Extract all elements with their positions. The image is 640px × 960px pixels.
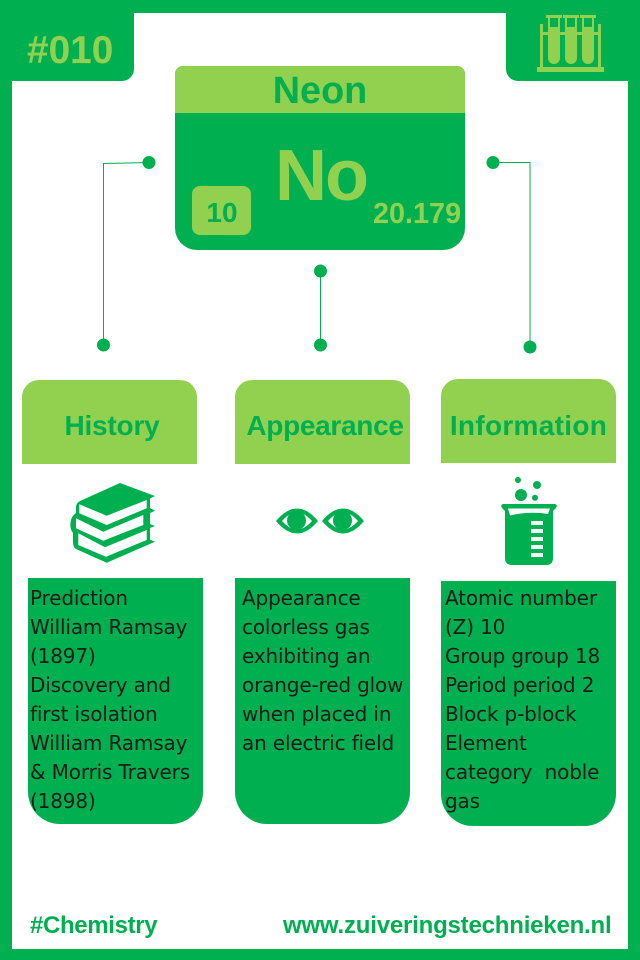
panel: information text: Element <box>445 731 527 755</box>
panel: history text: William Ramsay <box>30 615 187 639</box>
panel: information text: Period period 2 <box>445 673 594 697</box>
connector: information <box>486 156 536 354</box>
atomic number box <box>192 186 251 235</box>
heading: history: History <box>64 410 160 441</box>
panel: history text: William Ramsay <box>30 731 187 755</box>
connector: appearance <box>314 264 327 352</box>
panel: information text: Atomic number <box>445 586 597 610</box>
panel: information text: gas <box>445 789 480 813</box>
panel: appearance text <box>235 578 410 824</box>
panel: history text: (1898) <box>30 789 96 813</box>
panel: appearance text: orange-red glow <box>242 673 403 697</box>
panel: history text: Discovery and <box>30 673 171 697</box>
footer: website: www.zuiveringstechnieken.nl <box>283 912 611 939</box>
connector: history <box>97 156 156 352</box>
heading: information: Information <box>450 410 607 441</box>
element name band: Neon <box>273 70 367 112</box>
panel: information text: (Z) 10 <box>445 615 505 639</box>
badge text: #010 <box>27 29 113 72</box>
panel: information text: category noble <box>445 760 599 784</box>
atomic mass: 20.179 <box>373 198 461 230</box>
panel: history text: & Morris Travers <box>30 760 190 784</box>
panel: appearance text: an electric field <box>242 731 394 755</box>
panel: information text <box>441 581 616 826</box>
heading: information <box>441 379 616 463</box>
icon: beaker <box>501 477 557 565</box>
icon: eyes <box>276 508 364 534</box>
panel: history text: (1897) <box>30 644 96 668</box>
heading: history <box>22 380 197 464</box>
panel: history text: first isolation <box>30 702 158 726</box>
badge: element number <box>0 0 134 81</box>
panel: history text <box>28 578 203 824</box>
element name band <box>175 66 465 113</box>
heading: appearance <box>235 380 410 464</box>
panel: appearance text: exhibiting an <box>242 644 370 668</box>
icon: test tubes <box>537 15 604 72</box>
panel: appearance text: Appearance <box>242 586 361 610</box>
panel: appearance text: when placed in <box>242 702 391 726</box>
atomic number box: 10 <box>206 197 238 228</box>
footer: hashtag: #Chemistry <box>30 912 157 939</box>
badge: test tube icon <box>506 0 640 81</box>
panel: appearance text: colorless gas <box>242 615 370 639</box>
element symbol: No <box>275 136 367 216</box>
heading: appearance: Appearance <box>246 410 404 441</box>
panel: information text: Block p-block <box>445 702 576 726</box>
element card <box>175 66 465 250</box>
panel: information text: Group group 18 <box>445 644 600 668</box>
panel: history text: Prediction <box>30 586 128 610</box>
icon: books <box>70 483 155 563</box>
